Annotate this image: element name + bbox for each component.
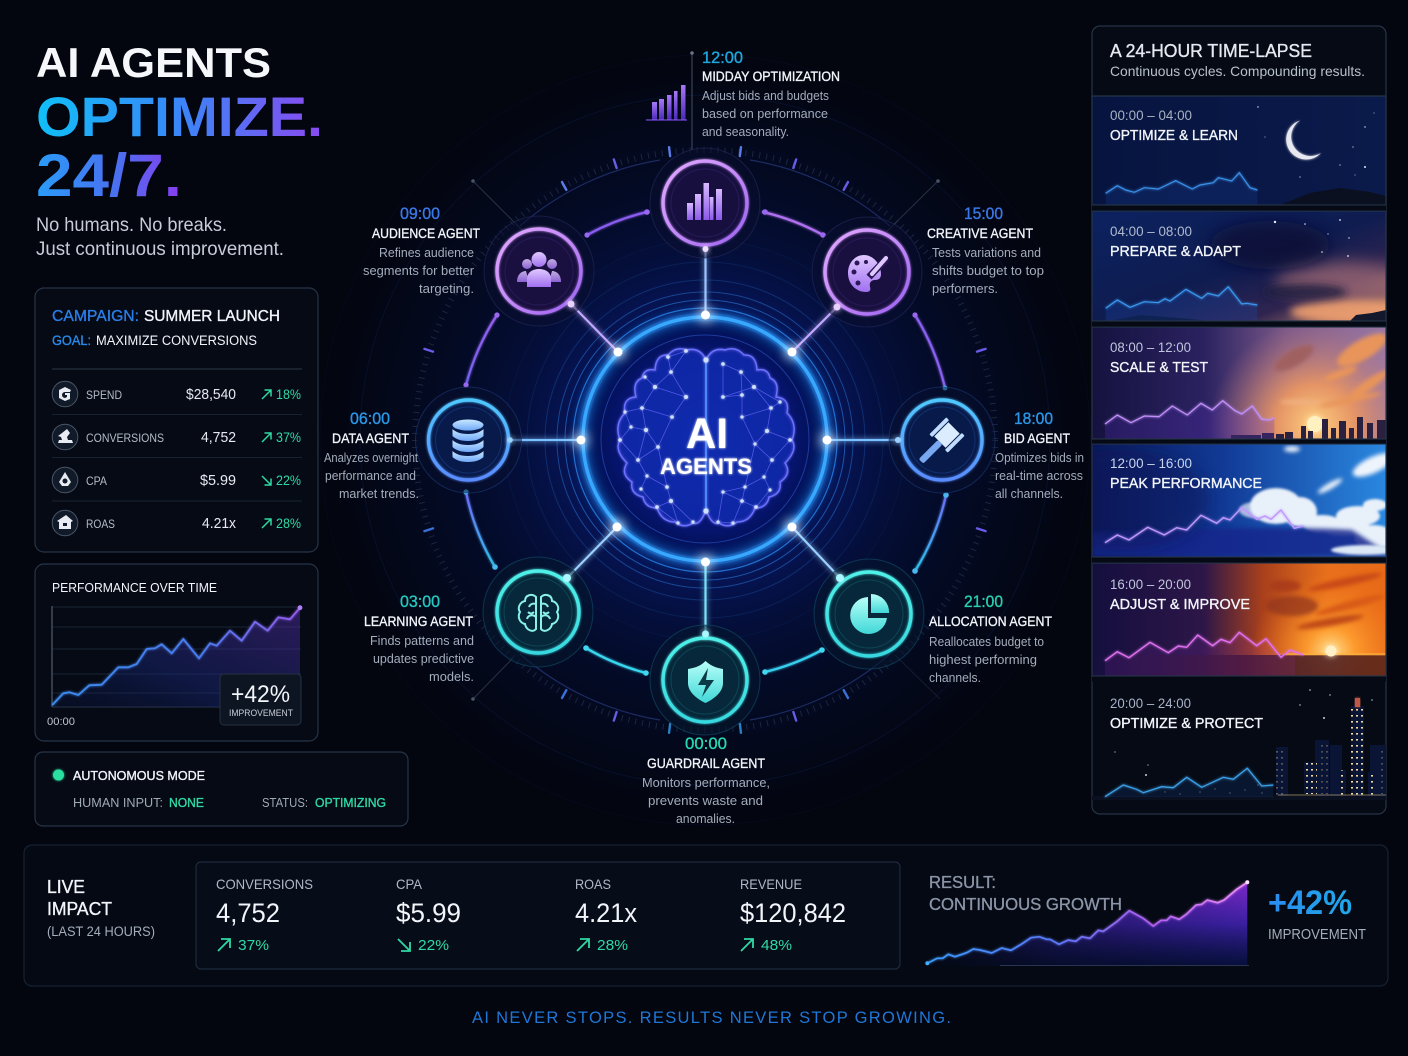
- improvement badge: [220, 674, 301, 725]
- card: 04:00-08:00 dawn: [1092, 212, 1386, 320]
- spokes: [508, 246, 900, 634]
- card: 12:00-16:00 midday sky: 12:00 – 16:00: [1110, 456, 1192, 471]
- metric: revenue: [740, 876, 846, 954]
- panel: performance over time: PERFORMANCE OVER TIME: [52, 580, 217, 595]
- card: 08:00-12:00 sunrise: 08:00 – 12:00: [1110, 340, 1191, 355]
- metric: roas: 4.21x: [575, 898, 637, 928]
- subtitle: No humans. No breaks.: [36, 214, 227, 236]
- label: 12:00 midday optimization: 12:00: [702, 49, 743, 67]
- icon: people: [517, 252, 561, 287]
- panel: autonomous mode: OPTIMIZING: [315, 796, 386, 810]
- card: 00:00-04:00 night: OPTIMIZE & LEARN: [1110, 128, 1238, 144]
- live impact heading: LIVE: [47, 877, 85, 897]
- metric row: roas: 28%: [276, 515, 301, 531]
- label: 21:00 allocation agent: Reallocates budget to: [929, 635, 1044, 649]
- metric: cpa: $5.99: [396, 898, 461, 928]
- live impact heading: IMPACT: [47, 899, 112, 919]
- label: 15:00 creative agent: CREATIVE AGENT: [927, 226, 1033, 241]
- brain network: [618, 349, 794, 526]
- card: 08:00-12:00 sunrise: [1092, 328, 1386, 438]
- metric row: conversions: [52, 424, 301, 450]
- title: OPTIMIZE.: [36, 85, 323, 148]
- timelapse heading: Continuous cycles. Compounding results.: [1110, 63, 1365, 79]
- label: 12:00 midday optimization: Adjust bids and budgets: [702, 89, 829, 103]
- label: 09:00 audience agent: Refines audience: [379, 246, 474, 260]
- node: creative agent: [812, 217, 922, 327]
- panel: autonomous mode: STATUS:: [262, 796, 308, 810]
- panel: campaign: GOAL:: [52, 333, 91, 348]
- label: 12:00 midday optimization: based on performance: [702, 107, 828, 121]
- spoke junction lights: [576, 310, 832, 566]
- metric: conversions: 4,752: [216, 898, 280, 928]
- label: 00:00 guardrail agent: anomalies.: [676, 812, 735, 826]
- icon: bar chart: [687, 183, 722, 220]
- icon: rising bars with stem: [646, 51, 694, 150]
- orbit arcs: [466, 212, 946, 673]
- label: 06:00 data agent: Analyzes overnight: [324, 451, 418, 465]
- node: audience agent: [484, 216, 594, 326]
- label: 21:00 allocation agent: 21:00: [964, 593, 1003, 611]
- live impact heading: [47, 877, 155, 939]
- title: 24/7.: [36, 142, 182, 209]
- label: 06:00 data agent: [324, 410, 419, 501]
- label: 18:00 bid agent: BID AGENT: [1004, 431, 1070, 446]
- timelapse heading: [1110, 41, 1365, 79]
- label: 03:00 learning agent: models.: [429, 670, 474, 684]
- label: 21:00 allocation agent: ALLOCATION AGENT: [929, 614, 1052, 629]
- title: AI AGENTS: [36, 39, 271, 86]
- concentric rings: [505, 240, 905, 640]
- improvement badge: +42%: [231, 681, 290, 708]
- card: 20:00-24:00 city night: OPTIMIZE & PROTECT: [1110, 716, 1263, 732]
- label: 00:00 guardrail agent: [642, 735, 770, 826]
- panel: autonomous mode: HUMAN INPUT:: [73, 796, 163, 810]
- node: guardrail agent: [650, 625, 760, 735]
- node: bid agent: [889, 387, 995, 493]
- node: allocation agent: [814, 559, 924, 669]
- metrics panel: [196, 862, 900, 969]
- node: data agent: [416, 387, 522, 493]
- label: 21:00 allocation agent: highest performing: [929, 653, 1037, 667]
- improvement badge: IMPROVEMENT: [229, 708, 293, 718]
- panel: autonomous mode: AUTONOMOUS MODE: [73, 768, 205, 783]
- metric row: spend: $28,540: [186, 386, 236, 403]
- label: 00:00 guardrail agent: prevents waste and: [648, 794, 763, 808]
- label: 03:00 learning agent: updates predictive: [373, 652, 474, 666]
- card: 20:00-24:00 city night: [1092, 682, 1386, 800]
- label: 06:00 data agent: performance and: [325, 469, 416, 483]
- node: learning agent: [483, 557, 593, 667]
- icon: gavel: [912, 417, 965, 470]
- metric: cpa: CPA: [396, 876, 423, 892]
- metric row: cpa: $5.99: [200, 472, 236, 489]
- icon: pie chart: [850, 594, 889, 634]
- panel: live impact: [24, 845, 1388, 986]
- card: 12:00-16:00 midday sky: PEAK PERFORMANCE: [1110, 476, 1262, 492]
- label: 03:00 learning agent: LEARNING AGENT: [364, 614, 473, 629]
- card: 20:00-24:00 city night: 20:00 – 24:00: [1110, 696, 1191, 711]
- label: 12:00 midday optimization: MIDDAY OPTIMIZATION: [702, 69, 840, 84]
- label: 00:00 guardrail agent: 00:00: [685, 735, 727, 753]
- result: continuous growth chart: CONTINUOUS GROWTH: [929, 894, 1122, 914]
- hub label: AI: [686, 410, 728, 458]
- card: 16:00-20:00 sunset: ADJUST & IMPROVE: [1110, 597, 1250, 613]
- label: 15:00 creative agent: Tests variations and: [932, 246, 1041, 260]
- metric row: cpa: CPA: [86, 474, 107, 488]
- outer tick ring: [415, 147, 995, 733]
- label: 18:00 bid agent: [995, 410, 1084, 501]
- node: midday optimization: [650, 148, 760, 258]
- metric row: cpa: 22%: [276, 472, 301, 488]
- label: 15:00 creative agent: shifts budget to top: [932, 264, 1044, 278]
- metric: cpa: 22%: [418, 937, 449, 954]
- improvement figure: [1268, 884, 1366, 943]
- metric row: spend: SPEND: [86, 388, 122, 402]
- label: 03:00 learning agent: Finds patterns and: [370, 634, 474, 648]
- card: 16:00-20:00 sunset: [1092, 564, 1386, 676]
- card: 00:00-04:00 night: 00:00 – 04:00: [1110, 108, 1192, 123]
- label: 09:00 audience agent: segments for better: [363, 264, 474, 278]
- label: 12:00 midday optimization: and seasonality.: [702, 125, 789, 139]
- central disc: [583, 317, 827, 561]
- metric: conversions: CONVERSIONS: [216, 876, 313, 892]
- subtitle: [36, 214, 284, 260]
- subtitle: Just continuous improvement.: [36, 238, 284, 260]
- live impact heading: (LAST 24 HOURS): [47, 924, 155, 939]
- result: continuous growth chart: [925, 872, 1249, 966]
- panel: autonomous mode: NONE: [169, 796, 204, 810]
- icon: database: [452, 420, 484, 462]
- panel: campaign: CAMPAIGN:: [52, 308, 139, 325]
- title: [36, 39, 323, 209]
- icon: palette: [848, 255, 887, 292]
- label: 15:00 creative agent: [927, 205, 1044, 296]
- label: 09:00 audience agent: targeting.: [419, 282, 474, 296]
- label: 18:00 bid agent: real-time across: [995, 469, 1083, 483]
- metric row: roas: 4.21x: [202, 515, 236, 532]
- metric: conversions: 37%: [238, 937, 269, 954]
- metric: revenue: $120,842: [740, 898, 846, 928]
- metric: cpa: [396, 876, 461, 954]
- label: 00:00 guardrail agent: Monitors performance,: [642, 776, 770, 790]
- label: 03:00 learning agent: 03:00: [400, 593, 440, 611]
- card: 00:00-04:00 night: [1092, 96, 1386, 205]
- metric: conversions: [216, 876, 313, 954]
- panel: autonomous mode: [35, 752, 408, 826]
- metric: roas: 28%: [597, 937, 628, 954]
- metric: revenue: 48%: [761, 937, 792, 954]
- hub label: [660, 410, 752, 479]
- metric: revenue: REVENUE: [740, 876, 802, 892]
- panel: performance over time: 00:00: [47, 716, 75, 728]
- label: 21:00 allocation agent: [929, 593, 1052, 685]
- label: 15:00 creative agent: performers.: [932, 282, 998, 296]
- hub label: AGENTS: [660, 454, 752, 479]
- card: 08:00-12:00 sunrise: SCALE & TEST: [1110, 360, 1208, 376]
- label: 12:00 midday optimization: [702, 49, 840, 139]
- metric row: cpa: [52, 467, 301, 493]
- label: 06:00 data agent: market trends.: [339, 487, 419, 501]
- metric: roas: [575, 876, 637, 954]
- label: 06:00 data agent: 06:00: [350, 410, 390, 428]
- metric row: conversions: 4,752: [201, 429, 236, 446]
- panel: campaign: MAXIMIZE CONVERSIONS: [96, 333, 257, 348]
- metric: roas: ROAS: [575, 876, 611, 892]
- improvement figure: IMPROVEMENT: [1268, 927, 1366, 943]
- result: continuous growth chart: RESULT:: [929, 872, 996, 892]
- panel: campaign: [35, 288, 318, 552]
- icon: shield: [688, 661, 723, 703]
- label: 18:00 bid agent: all channels.: [995, 487, 1063, 501]
- label: 03:00 learning agent: [364, 593, 474, 684]
- timelapse heading: A 24-HOUR TIME-LAPSE: [1110, 41, 1312, 61]
- panel: 24-hour time-lapse: [1091, 25, 1387, 815]
- label: 15:00 creative agent: 15:00: [964, 205, 1003, 223]
- footer tagline: AI NEVER STOPS. RESULTS NEVER STOP GROWING.: [472, 1009, 951, 1027]
- central hub diagram: [415, 147, 995, 735]
- label: 18:00 bid agent: 18:00: [1014, 410, 1053, 428]
- label: 21:00 allocation agent: channels.: [929, 671, 981, 685]
- metric row: conversions: CONVERSIONS: [86, 431, 164, 445]
- improvement figure: +42%: [1268, 884, 1352, 922]
- card: 12:00-16:00 midday sky: [1092, 444, 1386, 556]
- metric row: spend: 18%: [276, 386, 301, 402]
- label: 09:00 audience agent: [363, 205, 480, 296]
- card: 16:00-20:00 sunset: 16:00 – 20:00: [1110, 577, 1191, 592]
- metric row: roas: ROAS: [86, 517, 115, 531]
- metric row: spend: [52, 381, 301, 407]
- label: 18:00 bid agent: Optimizes bids in: [995, 451, 1084, 465]
- card: 04:00-08:00 dawn: PREPARE & ADAPT: [1110, 244, 1241, 260]
- icon: brain outline: [519, 595, 558, 631]
- main glowing ring: [583, 317, 827, 561]
- card: 04:00-08:00 dawn: 04:00 – 08:00: [1110, 224, 1192, 239]
- label: 09:00 audience agent: AUDIENCE AGENT: [372, 226, 480, 241]
- label: 00:00 guardrail agent: GUARDRAIL AGENT: [647, 756, 765, 771]
- label: 06:00 data agent: DATA AGENT: [332, 431, 409, 446]
- label: 09:00 audience agent: 09:00: [400, 205, 440, 223]
- metric row: roas: [52, 510, 301, 536]
- panel: performance over time: [35, 564, 318, 741]
- panel: campaign: SUMMER LAUNCH: [144, 308, 280, 325]
- line chart: [52, 605, 302, 707]
- metric row: conversions: 37%: [276, 429, 301, 445]
